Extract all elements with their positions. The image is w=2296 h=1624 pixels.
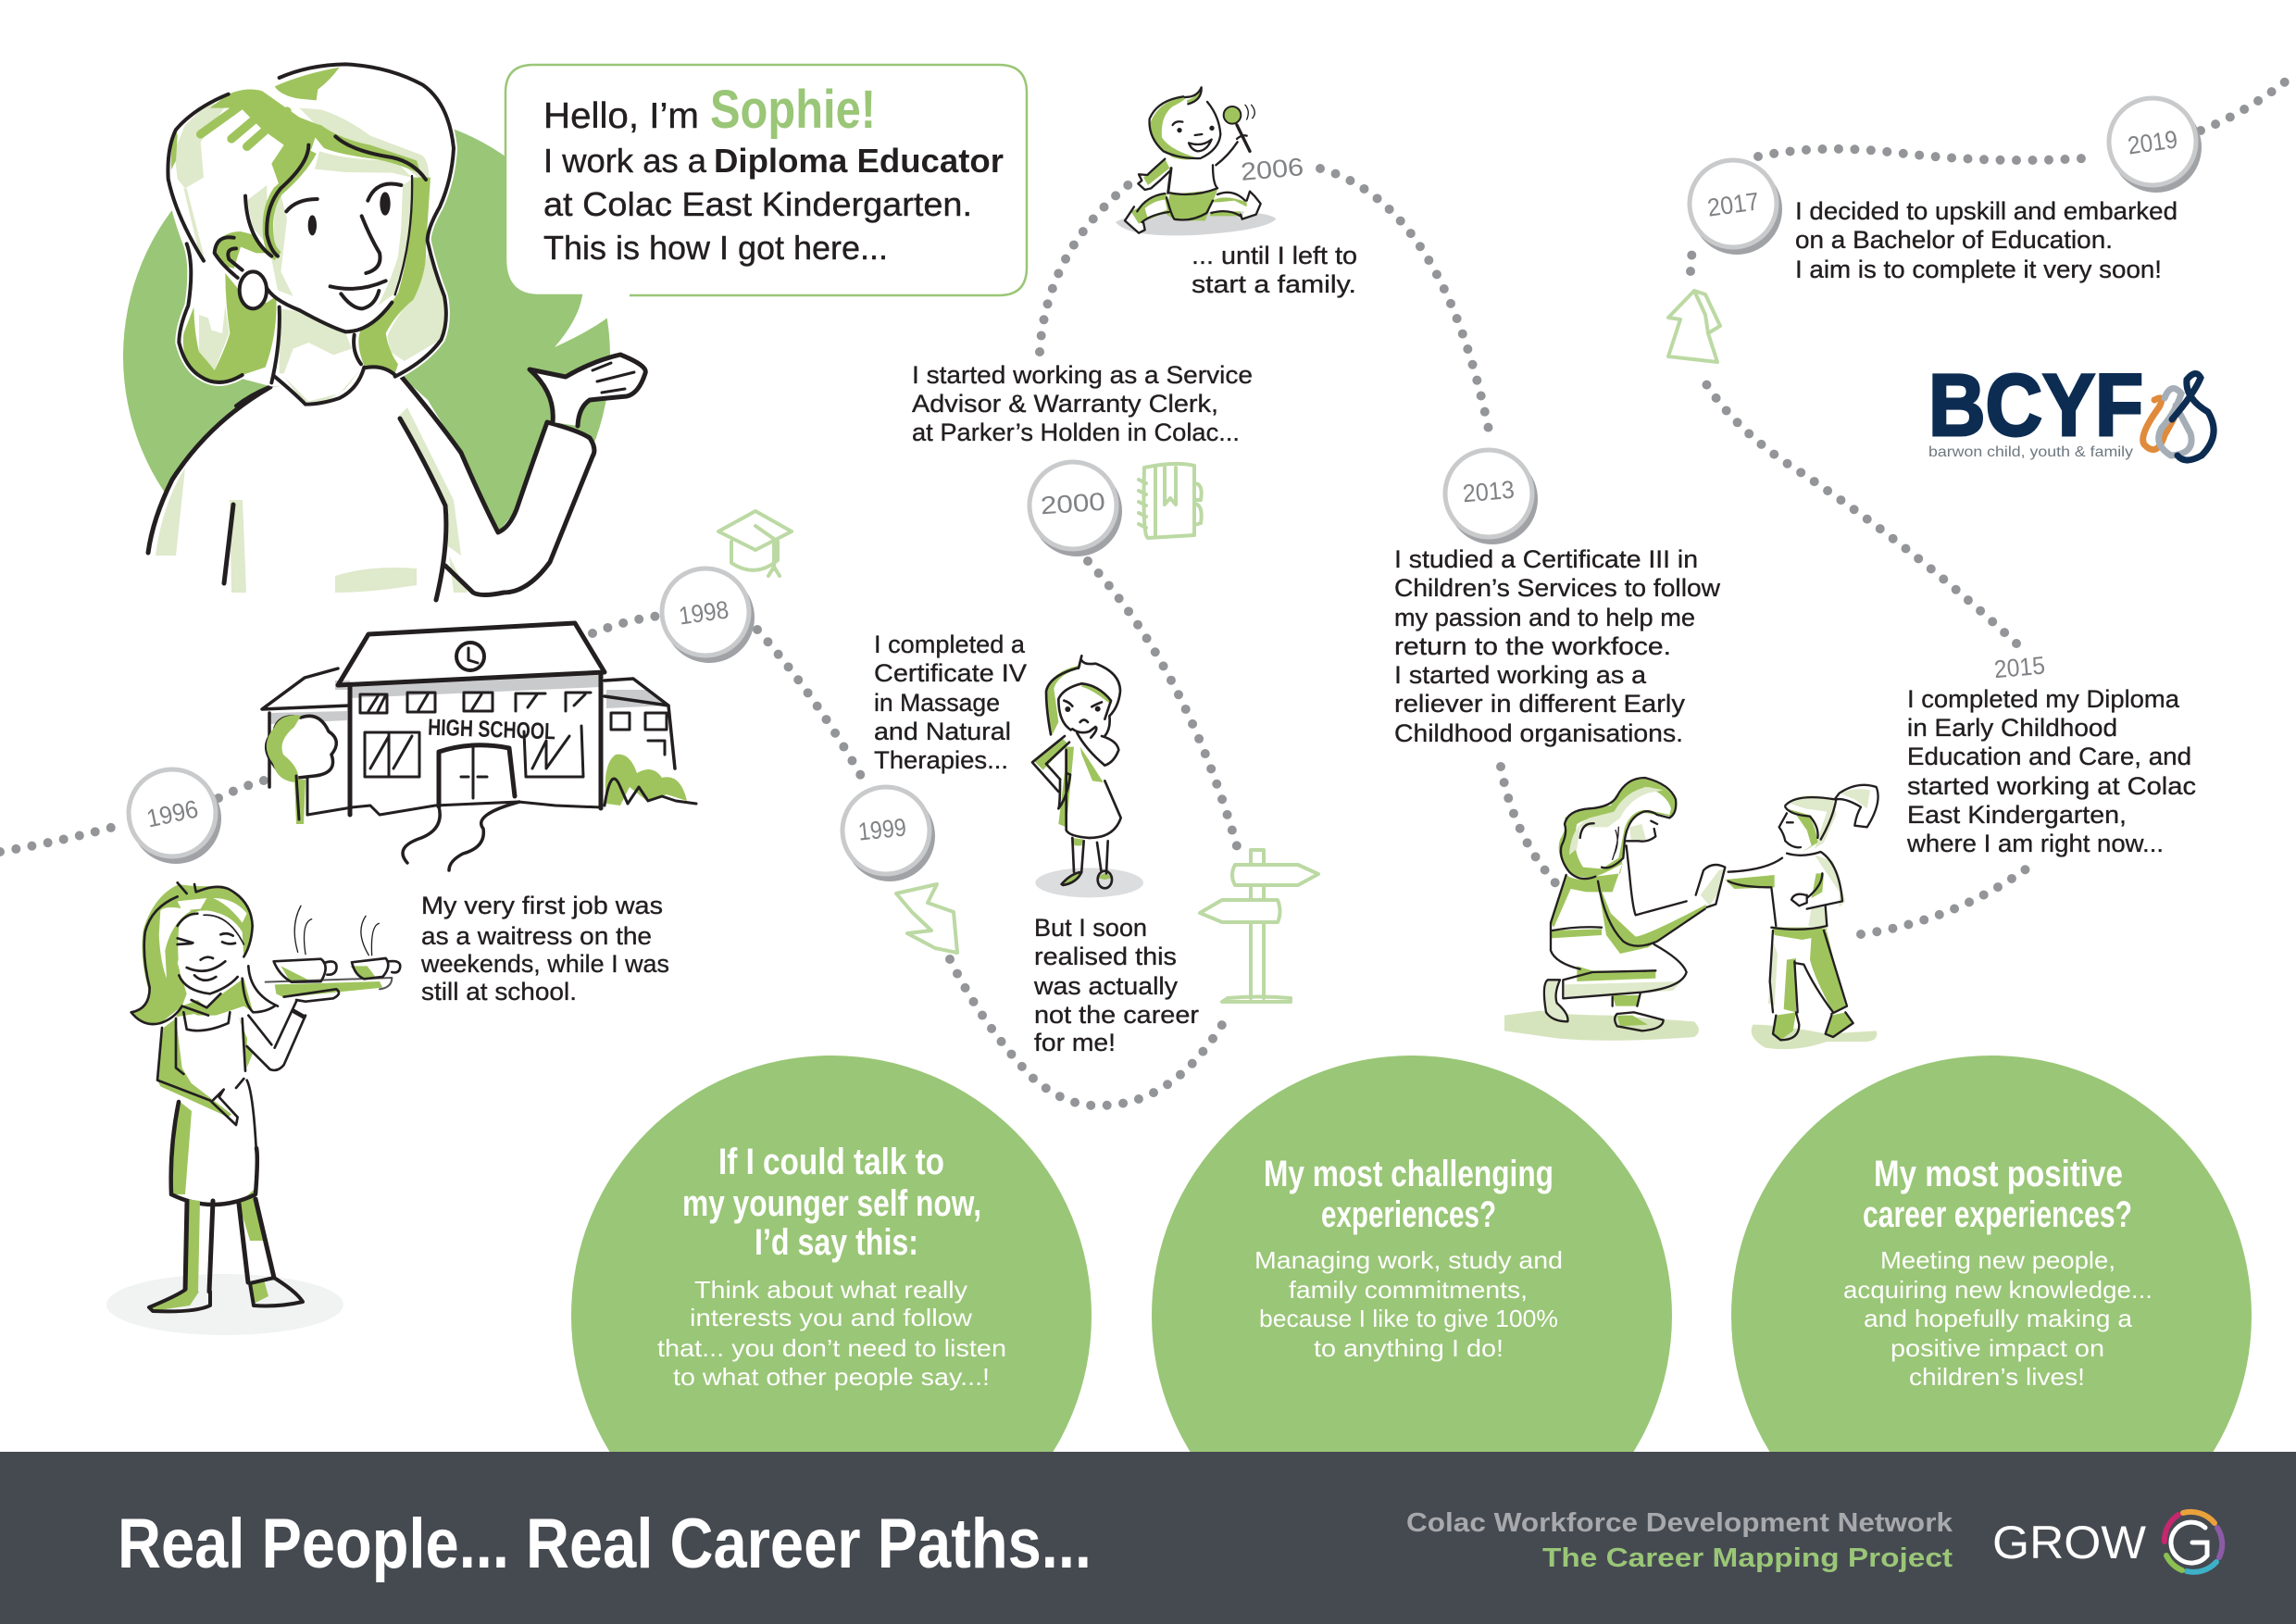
- Sophie face lines: [168, 64, 454, 406]
- speech text: I work as a: [543, 142, 707, 180]
- panel: positive experiences: acquiring new knowledge...: [1843, 1276, 2152, 1304]
- footer network name: Colac Workforce Development Network: [1406, 1508, 1953, 1538]
- panel: positive experiences: and hopefully making a: [1864, 1305, 2133, 1332]
- panel: positive experiences: [1731, 1056, 2252, 1576]
- bushes: [605, 755, 687, 806]
- illustration: waitress: [106, 882, 400, 1335]
- text: but I soon: But I soon: [1034, 914, 1147, 942]
- text: diploma: East Kindergarten,: [1907, 801, 2127, 829]
- speech text: Diploma Educator: [714, 142, 1004, 180]
- speech bubble outline: [505, 65, 1027, 295]
- year marker 1999: [842, 787, 935, 881]
- text: bachelor: I aim is to complete it very soon!: [1795, 256, 2162, 283]
- text: diploma: [1906, 685, 2196, 857]
- year marker 1999: 1999: [856, 813, 907, 846]
- year marker 2013: [1445, 450, 1538, 544]
- panel: positive experiences: positive impact on: [1890, 1334, 2104, 1362]
- panel: younger self: my younger self now,: [682, 1183, 981, 1224]
- Sophie body: [139, 375, 593, 611]
- panel: younger self: I’d say this:: [755, 1222, 918, 1263]
- icon: lightning arrow: [896, 884, 957, 953]
- text: service advisor: Advisor & Warranty Clerk,: [912, 390, 1218, 418]
- year marker 2015: 2015: [1993, 652, 2046, 683]
- text: but I soon: for me!: [1034, 1029, 1116, 1056]
- text: certificate III: I studied a Certificate III in: [1394, 545, 1698, 573]
- footer band: [0, 1452, 2296, 1624]
- year marker 2000: [1029, 462, 1122, 556]
- waitress text: weekends, while I was: [420, 950, 669, 978]
- footer project name: The Career Mapping Project: [1542, 1543, 1953, 1573]
- panel: challenging experiences: [1152, 1056, 1672, 1576]
- text: bachelor: [1795, 197, 2177, 283]
- GROW wordmark: GROW: [1992, 1517, 2147, 1568]
- illustration: educator and child: [1504, 778, 1878, 1049]
- panel: challenging experiences: because I like to give 100%: [1259, 1305, 1558, 1332]
- text: but I soon: was actually: [1033, 972, 1179, 1000]
- panel: younger self: [571, 1056, 1092, 1576]
- icon: mortarboard: [718, 511, 792, 576]
- panel: positive experiences: children’s lives!: [1909, 1363, 2085, 1391]
- text: diploma: where I am right now...: [1906, 830, 2164, 857]
- text: bachelor: on a Bachelor of Education.: [1795, 226, 2113, 254]
- text: certificate IV: I completed a: [874, 631, 1026, 658]
- school building lines: [338, 623, 605, 685]
- year marker 1996: [129, 769, 221, 864]
- text: diploma: Education and Care, and: [1907, 743, 2191, 770]
- year marker 2006: 2006: [1240, 153, 1304, 186]
- green circle behind Sophie: [123, 113, 610, 600]
- speech text: at Colac East Kindergarten.: [543, 185, 972, 223]
- illustration: thinking girl: [1032, 656, 1143, 897]
- text: but I soon: [1033, 914, 1199, 1056]
- text: until I left: [1192, 242, 1357, 298]
- text: diploma: I completed my Diploma: [1907, 685, 2180, 713]
- illustration: Sophie: [139, 64, 645, 611]
- waitress text: as a waitress on the: [421, 922, 652, 950]
- year marker 2019: [2109, 98, 2202, 193]
- panel: challenging experiences: family commitments,: [1289, 1276, 1528, 1304]
- educator and child lines: [1544, 778, 1878, 1040]
- illustration: high school: [262, 623, 696, 870]
- panel: younger self: to what other people say...!: [673, 1363, 990, 1391]
- year marker 1998: [662, 568, 755, 663]
- text: certificate III: [1394, 545, 1721, 747]
- text: service advisor: [912, 361, 1253, 446]
- speech text: [543, 80, 1004, 267]
- panel: positive experiences: career experiences?: [1863, 1194, 2132, 1235]
- speech bubble: [505, 65, 1027, 347]
- icon: signpost: [1200, 850, 1318, 1002]
- text: until I left: start a family.: [1192, 270, 1356, 298]
- panel: challenging experiences: My most challenging: [1264, 1154, 1554, 1194]
- waitress text: My very first job was: [421, 892, 663, 919]
- text: service advisor: I started working as a Service: [912, 361, 1253, 389]
- ground and path: [307, 802, 602, 815]
- year marker 1998: 1998: [677, 595, 730, 631]
- year marker 2017: 2017: [1705, 187, 1761, 222]
- text: certificate IV: [874, 631, 1027, 774]
- speech text: This is how I got here...: [543, 229, 888, 267]
- panel: younger self: Think about what really: [694, 1276, 967, 1304]
- text: but I soon: not the career: [1034, 1001, 1199, 1029]
- year marker 2000: 2000: [1040, 488, 1106, 519]
- text: service advisor: at Parker’s Holden in Colac...: [912, 418, 1240, 446]
- panel: challenging experiences: experiences?: [1321, 1194, 1496, 1235]
- text: certificate III: Children’s Services to follow: [1394, 574, 1721, 602]
- panel: challenging experiences: Managing work, study and: [1254, 1246, 1563, 1274]
- Sophie hand: [530, 355, 645, 426]
- text: but I soon: realised this: [1034, 943, 1177, 970]
- school fill: [269, 681, 675, 815]
- text: certificate III: reliever in different Early: [1394, 690, 1686, 718]
- text: diploma: started working at Colac: [1907, 772, 2196, 800]
- icon: notebook: [1139, 464, 1202, 538]
- panel: positive experiences: Meeting new people,: [1880, 1246, 2115, 1274]
- text: diploma: in Early Childhood: [1907, 714, 2117, 742]
- text: certificate IV: in Massage: [874, 689, 1000, 717]
- logo: BCYF: barwon child, youth & family: [1928, 444, 2133, 460]
- Sophie body outline: [148, 387, 270, 553]
- text: certificate IV: Therapies...: [874, 746, 1008, 774]
- text: certificate IV: and Natural: [874, 718, 1011, 745]
- footer title: Real People... Real Career Paths...: [118, 1505, 1092, 1583]
- panel: challenging experiences: to anything I do!: [1314, 1334, 1504, 1362]
- Sophie head and hair: [168, 64, 454, 406]
- tree: [267, 716, 336, 778]
- child fills: [1787, 795, 1836, 849]
- year marker 2013: 2013: [1462, 476, 1516, 507]
- illustration: baby: [1116, 87, 1276, 235]
- waitress upper body: [131, 882, 400, 1148]
- waitress text: still at school.: [421, 978, 577, 1006]
- text: certificate III: my passion and to help me: [1394, 604, 1695, 631]
- timeline dotted path: [0, 73, 2296, 1106]
- waitress skirt and legs: [170, 1100, 255, 1204]
- text: bachelor: I decided to upskill and embarked: [1795, 197, 2177, 225]
- logo: BCYF: BCYF: [1928, 356, 2143, 455]
- icon: up arrow: [1668, 291, 1720, 362]
- speech text: Sophie!: [710, 80, 876, 140]
- waitress text: [420, 892, 669, 1006]
- panel: positive experiences: My most positive: [1874, 1154, 2123, 1194]
- panel: younger self: that... you don’t need to listen: [657, 1334, 1006, 1362]
- text: certificate III: return to the workfoce.: [1394, 632, 1671, 660]
- text: certificate III: I started working as a: [1394, 661, 1647, 689]
- logo knot: [2143, 398, 2174, 450]
- panel: younger self: If I could talk to: [718, 1142, 944, 1182]
- panel: younger self: interests you and follow: [690, 1304, 972, 1331]
- GROW logo: [2165, 1512, 2222, 1572]
- year marker 2019: 2019: [2126, 125, 2179, 160]
- year marker 1996: 1996: [144, 794, 201, 832]
- illustration: high school: HIGH SCHOOL: [428, 715, 556, 744]
- text: certificate IV: Certificate IV: [874, 659, 1027, 687]
- text: certificate III: Childhood organisations.: [1394, 719, 1683, 747]
- text: until I left: ... until I left to: [1192, 242, 1357, 269]
- educator fills: [1559, 778, 1676, 877]
- year marker 2017: [1690, 160, 1782, 255]
- speech text: Hello, I’m: [543, 96, 699, 136]
